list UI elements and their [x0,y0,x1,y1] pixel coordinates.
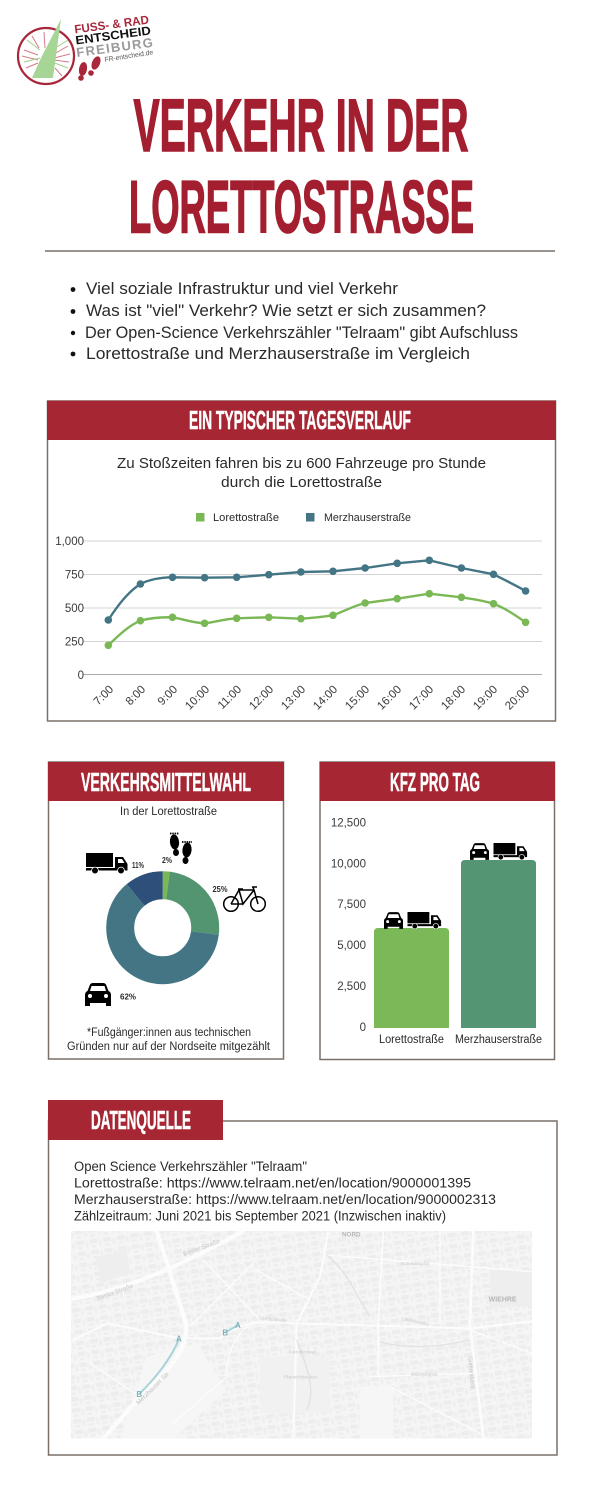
logo text: Freiburg: FREIBURG [75,35,154,60]
bar chart: 0 [360,1022,366,1034]
bullet list: Lorettostraße und Merzhauserstraße im Vergleich [86,344,470,363]
icon: footprints [78,55,102,81]
x axis labels: 20:00 [503,684,532,712]
label: trucks 11%: 11% [132,860,144,870]
icon: bicycle [224,887,265,911]
x axis labels: 19:00 [471,684,500,712]
footnote: Gründen nur auf der Nordseite mitgezählt [67,1041,271,1053]
map: Planschbecken [284,1375,318,1381]
line chart: 250 [65,636,84,648]
panel heading: KFZ PRO TAG [390,767,480,797]
donut chart [120,885,205,970]
subtitle: In der Lorettostraße [120,806,217,818]
label: cycling 25%: 25% [212,884,228,894]
icon: footprints [169,834,192,864]
line chart [55,536,542,712]
x axis labels: 15:00 [343,684,372,712]
x axis labels: 8:00 [124,684,148,708]
title [129,84,474,249]
panel header [47,401,556,440]
map: B [136,1390,142,1399]
panel heading: DATENQUELLE [91,1105,191,1135]
logo text: web address: FR-entscheid.de [104,49,154,64]
bullet list: Viel soziale Infrastruktur und viel Verkehr [86,279,398,298]
x axis labels: 18:00 [439,684,468,712]
bar chart: 5,000 [337,940,366,952]
map: Familienbad [289,1349,316,1355]
map: WIEHRE [489,1296,517,1303]
legend: Lorettostraße [213,512,279,524]
panel header [48,762,284,801]
bar chart [331,818,542,1046]
icon: minster spire [32,19,61,78]
map: NORD [342,1231,361,1238]
panel: mode share [48,762,284,1059]
map: Konradstraße [401,1261,430,1266]
map: Basler Straße [96,1283,135,1303]
map [71,1231,532,1439]
bullet list: Der Open-Science Verkehrszähler "Telraam" gibt Aufschluss [85,323,518,342]
source text: Zählzeitraum: Juni 2021 bis September 2021 (Inzwischen inaktiv) [74,1208,446,1224]
line: Lorettostraße [104,590,529,649]
label: cars 62%: 62% [120,992,136,1002]
axis label: Lorettostraße: Lorettostraße [379,1034,444,1046]
line chart: 1,000 [55,536,84,548]
x axis labels: 11:00 [216,684,244,712]
line: Merzhauserstraße [104,556,529,624]
bar chart: 7,500 [337,899,366,911]
panel heading: EIN TYPISCHER TAGESVERLAUF [189,405,411,435]
bullet list [71,279,518,363]
map: A [235,1321,241,1330]
line chart: 750 [65,570,84,582]
map: Merzhauser Str [135,1371,171,1406]
panel header [320,762,555,801]
icons: car and truck on Lorettostraße [384,912,441,929]
x axis labels: 17:00 [407,684,436,712]
map: Günterstalstr. [466,1356,475,1391]
chart description: Zu Stoßzeiten fahren bis zu 600 Fahrzeuge pro Stunde [117,456,486,472]
map: B [222,1328,228,1337]
x axis labels [92,684,532,712]
bar chart: 10,000 [331,858,366,870]
source text: Open Science Verkehrszähler "Telraam" [74,1159,307,1174]
label: walking 2%: 2% [162,855,172,865]
panel header [48,1100,223,1140]
map: Maximilianstr. [411,1372,439,1377]
x axis labels: 12:00 [247,684,276,712]
x axis labels: 16:00 [375,684,404,712]
map: Basler Straße [182,1238,221,1258]
chart description: durch die Lorettostraße [221,475,382,491]
panel heading: VERKEHRSMITTELWAHL [81,767,251,797]
map: A [176,1335,182,1344]
panel: data source [48,1100,557,1455]
legend [196,512,411,524]
bar chart: 2,500 [337,981,366,993]
x axis labels: 9:00 [156,684,180,708]
bar chart: 12,500 [331,818,366,830]
x axis labels: 13:00 [279,684,308,712]
icon: car [85,983,111,1006]
panel: vehicles per day [320,762,555,1060]
map: Lorettostraße [259,1315,288,1323]
chart description [117,456,486,491]
source text: Lorettostraße: https://www.telraam.net/en/location/9000001395 [74,1176,471,1190]
line chart: 0 [78,670,84,682]
panel: typical daily profile [47,401,556,721]
bar: Merzhauserstraße [461,860,536,1028]
bullet list: Was ist "viel" Verkehr? Wie setzt er sich zusammen? [86,301,486,320]
icon: truck [86,853,128,874]
bar: Lorettostraße [374,928,449,1028]
source text: Merzhauserstraße: https://www.telraam.net/en/location/9000002313 [74,1192,496,1207]
legend: Merzhauserstraße [324,512,411,524]
line chart: 500 [65,603,84,615]
map: Lorettostraße [401,1316,430,1327]
logo text: Fuss & Rad: FUSS- & RAD [74,13,150,36]
x axis labels: 7:00 [92,684,116,708]
icon: wheel [18,28,74,84]
x axis labels: 10:00 [183,684,212,712]
x axis labels: 14:00 [311,684,340,712]
icons: car and truck on Merzhauserstraße [470,843,527,860]
logo: Fuss- & Rad Entscheid Freiburg [18,13,154,84]
footnote: *Fußgänger:innen aus technischen [87,1027,251,1039]
logo text: Entscheid: ENTSCHEID [75,23,152,47]
source text [74,1159,496,1224]
axis label: Merzhauserstraße: Merzhauserstraße [455,1034,542,1046]
footnote [67,1027,271,1053]
